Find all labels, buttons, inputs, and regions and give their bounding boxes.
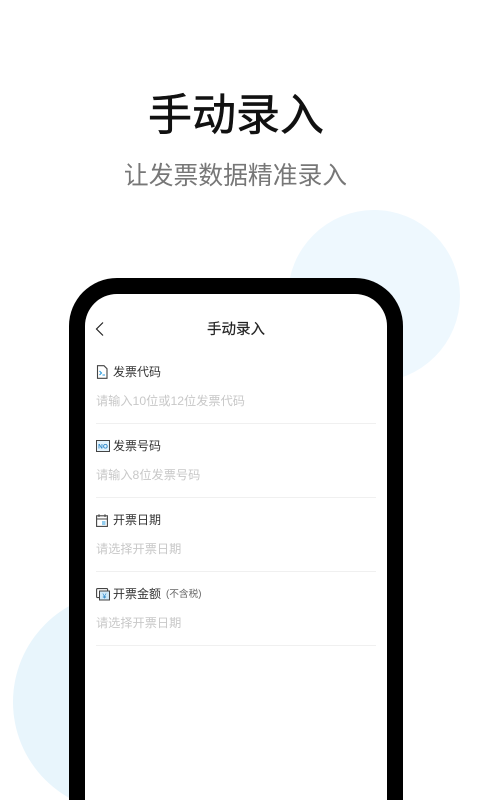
divider [96, 645, 376, 646]
title: 手动录入 [148, 91, 324, 140]
icon: document [96, 365, 108, 379]
label: 发票代码 [113, 365, 161, 379]
divider [96, 497, 376, 498]
icon: calendar [96, 514, 108, 527]
icon: money card [96, 588, 110, 600]
icon: NO badge: NO [98, 444, 108, 450]
phone mockup [69, 278, 403, 800]
placeholder: 请选择开票日期 [96, 616, 181, 630]
label: 开票日期 [113, 513, 161, 527]
placeholder: 请输入10位或12位发票代码 [96, 394, 245, 408]
field: invoice date [96, 513, 376, 572]
decorative circle: bottom left [13, 606, 69, 798]
label: 开票金额 [113, 587, 161, 601]
subtitle: 让发票数据精准录入 [124, 163, 347, 190]
label: 发票号码 [113, 439, 161, 453]
placeholder: 请输入8位发票号码 [96, 468, 200, 482]
field: invoice amount [96, 587, 376, 646]
field: invoice code [96, 365, 376, 424]
decorative circle: top right [288, 210, 460, 382]
back arrow icon [96, 322, 104, 336]
icon: money card: ¥ [103, 594, 107, 600]
icon: NO badge [96, 440, 110, 452]
screen heading: 手动录入 [207, 322, 265, 338]
divider [96, 571, 376, 572]
field: invoice number [96, 439, 376, 498]
tax note: (不含税) [166, 589, 202, 600]
placeholder: 请选择开票日期 [96, 542, 181, 556]
divider [96, 423, 376, 424]
